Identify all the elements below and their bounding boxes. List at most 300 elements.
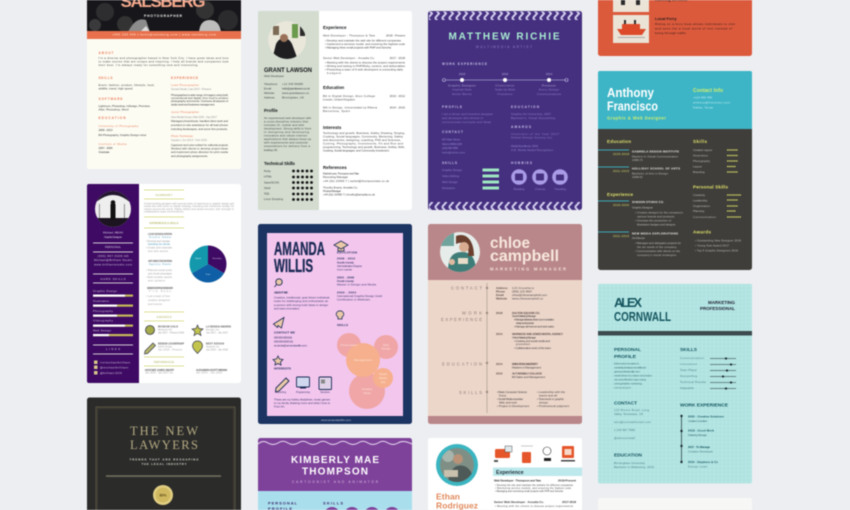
sidebar links: LINKS <box>106 347 120 351</box>
skills bubble chart: Media <box>379 376 387 380</box>
sidebar contact <box>93 230 133 266</box>
profile <box>442 105 493 124</box>
name: Graphic & Web Designer <box>607 116 666 120</box>
experience list: and updates <box>148 280 166 282</box>
pie chart: Digital <box>195 257 202 260</box>
panel: Salsberg photographer resume <box>87 0 241 169</box>
panel: Alex Cornwall resume <box>598 284 752 484</box>
work experience: • Collaborative work of the team <box>514 346 552 350</box>
contact <box>614 400 652 440</box>
role: CARTOONIST AND ANIMATOR <box>292 480 379 484</box>
personal skills ratings: Leadership <box>693 198 708 202</box>
technical skills <box>264 161 313 201</box>
personal profile: campaigns. <box>614 386 632 390</box>
left column: BA Photography, Graphic Design minor <box>98 133 147 137</box>
experience: illustration badges and designs. <box>637 222 676 226</box>
awards: Awards <box>693 230 711 234</box>
experience: • Writing and testing in PHP/Ruby, content, and deliverables <box>325 64 406 68</box>
contact me: amanda@amandawillis.com <box>274 344 308 348</box>
left column: After, Photoshop, Word <box>98 108 129 112</box>
interests: INTERESTS <box>274 366 291 370</box>
references: Jan 2014 - Jan 2016 <box>196 372 223 374</box>
name <box>436 492 478 510</box>
about me: looks for challenging and enthusiastic as <box>274 299 329 303</box>
experience column: and implement photo direction for print media <box>171 150 228 154</box>
experience: NEW MEDIA EXPLORATIONS <box>632 231 678 235</box>
interests <box>323 125 405 152</box>
divider bar <box>598 331 752 336</box>
gold frame <box>96 407 235 510</box>
experience column: New Media Group | Mar 2015 - Sep 2017 <box>171 115 217 119</box>
contact info <box>693 88 731 110</box>
personal profile: Extremely innovative & <box>614 362 639 366</box>
personal profile heading: PERSONAL <box>268 500 298 506</box>
skills lists <box>497 390 569 408</box>
experience list: ART DIRECTOR INTERN <box>148 260 172 263</box>
education: 2015-2018 <box>613 152 629 156</box>
profile: An experienced web developer with <box>264 116 311 120</box>
education: BA Sales and Management <box>512 375 545 379</box>
education: GABRIELA DESIGN INSTITUTE <box>632 149 679 153</box>
personal skills ratings: Organization <box>693 204 710 208</box>
interests: Technology and growth, Business, Hobby, Drawing, Singing, <box>323 131 405 135</box>
experience band: Experience <box>496 470 524 476</box>
skills lists: • Basic Computer Science <box>497 390 527 394</box>
interests: Free Art. <box>274 404 285 408</box>
left column: 2009 - 2013 <box>98 128 113 132</box>
percent badge: 80% <box>159 494 167 498</box>
about section: I'm a diverse and photographer based in New York City. I have great ideas and love <box>98 56 229 60</box>
hobbies icons <box>511 161 568 191</box>
skills bars <box>442 161 499 190</box>
skills bubble chart: Creative <box>362 387 373 391</box>
name: KIMBERLY MAE <box>291 455 379 466</box>
awards: BEST DESIGN <box>206 342 224 346</box>
skills sliders: Adaptable <box>680 386 694 390</box>
personal profile: PERSONAL <box>614 347 641 352</box>
interests: Sketches <box>320 391 331 394</box>
summary: A hard-working designer with several years of experience in graphic design and <box>144 202 235 206</box>
experience column: Worked with clients to develop project ideas <box>171 146 229 150</box>
contact <box>442 130 466 154</box>
contact details: chloe@chloecampbell.com <box>512 293 548 297</box>
sidebar contact: www.brilliantstudio.com <box>94 262 133 266</box>
skills ratings: Branding <box>693 170 705 174</box>
education: Graphic Art University, 2007 <box>511 112 551 116</box>
icon: magnifier <box>274 279 282 287</box>
personal skills ratings: Communication <box>693 215 716 219</box>
education: 2011-2015 <box>613 169 629 173</box>
experience list: Agency Name <box>149 263 172 266</box>
technical skills: HTML <box>264 174 272 178</box>
interests: programming, Technology and growth, Business, Hobby, Web, <box>323 145 405 149</box>
skills lists: • Teamwork in graphic <box>537 397 565 401</box>
skills: SKILLS <box>323 500 343 506</box>
peach body <box>428 280 582 416</box>
interests: These are my hobby disciplines, music games <box>274 398 331 402</box>
personal profile: grows professionally. I am <box>614 370 641 374</box>
experience column: photography and events. Oversees all aspects of <box>171 99 228 103</box>
contact: 1 234 567 7890 <box>614 428 635 432</box>
work experience timeline: Producer <box>542 84 556 88</box>
experience list: Studio Name <box>149 236 172 239</box>
skills sliders <box>680 347 736 390</box>
blue lower section <box>258 491 412 510</box>
skills lists: • Social Media expertise <box>497 397 523 401</box>
education: Certification in Webinars <box>337 298 371 302</box>
awards: AWARDS <box>511 125 531 129</box>
experience list: and web assets <box>148 250 169 253</box>
name: Francisco <box>607 100 658 114</box>
sidebar skill bars: HARD SKILLS <box>100 277 126 281</box>
sidebar contact: Graphic Designer <box>104 235 122 239</box>
icon: light bulb <box>336 311 344 319</box>
education: Lincoln, United Kingdom <box>323 98 356 102</box>
contact details: Website <box>496 296 507 300</box>
work experience: WARNOCK AND JONES DIGITAL AGENCY <box>512 332 563 336</box>
contact: (123) 456-7890 <box>442 146 458 150</box>
subtitle: TRENDS THAT ARE RESHAPING <box>130 458 199 462</box>
skills ratings: Creative Layout <box>693 148 712 152</box>
personal profile heading <box>268 500 298 510</box>
subtitle <box>130 458 199 466</box>
panel: blank card edge <box>598 498 752 510</box>
references: Rachel Lane, Thompson and Tate <box>323 172 359 176</box>
about me: and team innovation. <box>274 306 300 310</box>
sidebar skill bars: Photography <box>93 309 114 313</box>
experience list: LEAD DESIGN INTERN <box>148 233 172 236</box>
sidebar links <box>93 344 133 375</box>
experience column <box>171 76 229 158</box>
awards: • Young Star Award 2017 <box>695 244 729 248</box>
left column: 2007 - 2009 <box>98 146 113 150</box>
pie chart: Branding <box>213 257 222 260</box>
interests: Cooking, Social languages, and Community Investment <box>323 148 389 152</box>
experience list: • Planned social posts <box>146 269 173 272</box>
experience list: and interns <box>148 303 163 306</box>
header photo <box>87 0 241 32</box>
panel: Grant Lawson resume <box>258 11 412 210</box>
work experience: • Managed all areas of team communication <box>514 318 554 322</box>
sidebar <box>87 184 139 383</box>
skills ratings: Skills <box>693 139 707 144</box>
experience: 2011-2015 <box>613 234 629 238</box>
timeline axis <box>486 283 488 413</box>
panel: Grant Lawson resume: Web Developer <box>264 74 284 78</box>
experience column: Lead Photographer <box>171 83 199 87</box>
chevron border bottom <box>429 202 581 210</box>
education: BRIGHTON UNIVERSITY <box>512 362 538 366</box>
interests: Cooking, Social languages, Community, Mentoring, Safety <box>323 134 404 138</box>
experience column: Photo Technician <box>171 134 193 138</box>
name <box>614 295 671 324</box>
experience: various brands and products. <box>637 214 675 218</box>
about section: ABOUT <box>98 51 114 55</box>
experience list: Web Developer - Thompson and Tate <box>494 478 541 482</box>
experience list: and visual campaigns <box>148 272 173 276</box>
work experience timeline: Freelance <box>498 92 513 96</box>
role: MULTIMEDIA ARTIST <box>476 45 532 49</box>
contact details: Address <box>496 286 508 290</box>
experience: budgets <box>327 71 342 75</box>
awards: • Outstanding New Designer 2019 <box>695 238 741 242</box>
education: Cum Laude <box>337 268 352 272</box>
sidebar skill bars: Graphic Design <box>93 289 117 293</box>
references: REFERENCE <box>154 360 174 364</box>
skills bars: SKILLS <box>442 161 457 165</box>
portrait <box>440 232 480 272</box>
left column: SOFTWARE <box>98 97 122 101</box>
contact rows: Website <box>264 91 275 95</box>
work experience: promotion <box>516 342 530 346</box>
education: 1998-02 <box>632 175 643 179</box>
awards: Jan 2017 - Present 2018 <box>158 332 185 334</box>
references: HEATHER JAMES SMART <box>145 369 175 372</box>
about section: to make stories that are unique and inspiring. I help all brands and companies look <box>98 60 229 64</box>
hobbies icons: Cinema <box>535 187 545 191</box>
education <box>614 452 654 469</box>
skills bubble chart: Management <box>354 358 372 362</box>
teal header <box>598 71 752 129</box>
experience: company's visual strategies. <box>637 253 677 257</box>
experience: • Presenting a team of 5 web developers to exceeding daily <box>325 68 404 72</box>
summary: visual arts with focus on digital strategy, branding and interactive design for <box>144 205 234 208</box>
work experience: • Manage all Internet and web sales <box>514 324 555 328</box>
icon: ferry boat <box>613 15 649 43</box>
education: Birmingham University <box>614 461 646 465</box>
awards: Design Inc. <box>206 328 220 332</box>
profile: innovative and robust internet <box>264 134 307 138</box>
profile <box>264 108 311 152</box>
work experience timeline: Design Lead <box>688 464 707 468</box>
work experience timeline: 2017 - To Manage <box>688 445 710 449</box>
education: 2000 - 2004 <box>337 290 356 294</box>
profile: includes UI, mobile and web <box>264 123 304 127</box>
work experience timeline <box>680 402 728 468</box>
experience: Senior Web Developer - Arcadia Co. <box>323 56 375 60</box>
experience list: Senior Web Developer - Arcadia Co. <box>494 500 544 504</box>
experience list: SENIOR GRAPHIC DESIGNER <box>147 287 173 290</box>
experience <box>323 25 406 75</box>
references: Timothy Evans, Arcadia Co. <box>323 186 358 190</box>
experience column: conventional and digital, from food to product <box>171 96 228 100</box>
education: 2008 - 2010 <box>337 256 355 260</box>
left column: Lightroom, Photoshop, InDesign, Premiere, <box>98 104 151 108</box>
experience column: studio work and business management. <box>171 102 215 106</box>
education: Bachelor's, Visual Storytelling <box>511 116 555 120</box>
skills lists: • Project in Development <box>497 404 529 408</box>
panel: Kimberly Mae Thompson resume <box>258 438 412 510</box>
work experience: • Creating and social media and <box>514 339 550 343</box>
contact: Valley, Tennessee, US <box>614 412 643 416</box>
experience: • Manages and delegates projects for <box>635 241 681 245</box>
skills lists: Web, and more <box>499 400 517 404</box>
panel: Matthew Richie resume <box>428 11 582 210</box>
awards <box>693 230 741 252</box>
name: chloe <box>490 235 530 252</box>
awards: Jan 2016 - Present <box>158 348 182 352</box>
education: Bachelor in Marketing, 2015 <box>614 465 654 469</box>
education: 2014 - 2016 <box>390 106 405 110</box>
awards: Illustrator of the Year 2017 <box>511 132 559 136</box>
hobbies icons: HOBBIES <box>511 161 532 165</box>
experience column: Captured and color-edited for editorial projects <box>171 143 229 147</box>
profile: communicate concepts and ideas <box>442 120 492 124</box>
experience: Web Developer - Thompson & Tate <box>323 34 375 38</box>
personal skills ratings: Personal Skills <box>693 184 728 190</box>
summary: clients around the world. Highly skilled and detail-oriented, with strength in <box>144 208 235 211</box>
work experience timeline: Marketing Manager <box>688 433 707 437</box>
personal skills ratings: Creativity <box>693 193 706 197</box>
experience list <box>494 478 576 508</box>
profile: development. Strong skills in front <box>264 126 311 130</box>
work experience timeline: 2016 <box>502 72 509 76</box>
work experience timeline: 2020 - Creative Solutions <box>688 414 724 418</box>
icon tile upper <box>613 0 649 12</box>
ferry text: being through traffic. <box>655 31 687 35</box>
personal profile: result-driven by nature and action <box>614 374 652 378</box>
contact info: Contact Info <box>693 88 723 94</box>
work experience: 2018 <box>496 311 503 315</box>
experience: Art Director <box>632 236 645 240</box>
name <box>490 235 566 272</box>
awards: AWARDS <box>156 315 172 319</box>
ferry text: and sees the a local world of rest instead of <box>655 26 732 30</box>
technical skills: Shell <box>264 186 271 190</box>
contact info: anthony@francisco.com <box>693 100 731 104</box>
experience: • Oversaw the production of <box>635 218 671 222</box>
interests <box>274 366 332 408</box>
about me: Creative, intellectual, goal driven individual, <box>274 296 330 300</box>
panel: red card with ferry <box>598 0 752 56</box>
references: Product Manager <box>323 189 341 193</box>
interests: and discoveries, designing, coaching, PhD and Sciences, <box>323 138 401 142</box>
skills <box>323 500 400 510</box>
awards: Museum Art <box>158 328 172 332</box>
about me: a person with strong bold ideas in design <box>274 303 328 307</box>
experience: • Implement a services model, and ensuring the highest code <box>325 42 405 46</box>
experience: • Meeting with the clients to discuss the project requirements <box>325 60 406 64</box>
profile: leading UK. <box>264 148 278 152</box>
interests: Sketching <box>276 391 287 394</box>
technical skills: Linux Scripting <box>264 197 283 201</box>
education <box>337 250 382 302</box>
education: BA in Digital Design, Eton College <box>323 94 375 98</box>
summary: SUMMARY <box>156 193 173 197</box>
work experience timeline: Senior Mentor <box>452 92 472 96</box>
left column: Institute of Media <box>98 142 127 146</box>
sidebar skill bars: Videography <box>93 318 114 322</box>
education: Masters in Management <box>512 366 541 370</box>
references <box>144 356 227 374</box>
work experience timeline: 2018 - Good Work <box>688 428 714 432</box>
work experience timeline <box>442 62 568 96</box>
name <box>291 455 379 478</box>
experience <box>598 192 684 257</box>
awards <box>511 125 559 152</box>
education: Bachelor of Arts in Design <box>632 172 668 176</box>
skills lists: • Leadership with the <box>537 390 565 394</box>
name <box>274 239 325 276</box>
panel: Amanda Willis resume <box>258 224 412 424</box>
work experience: design and products <box>516 321 535 325</box>
experience column: EXPERIENCE <box>171 76 198 80</box>
profile: Profile <box>264 108 278 113</box>
work experience timeline: Graphic Designer <box>448 84 476 88</box>
education: Borcelle University <box>337 260 355 264</box>
profile: I am a driven and inventive designer <box>442 112 493 116</box>
awards: Jan 2017 - Jan 2017 <box>206 332 229 334</box>
experience list: • Led a team of four <box>146 295 170 298</box>
education: HOLLIDAY SCHOOL OF ARTS <box>632 166 680 170</box>
work experience: Online Marketing Manager <box>512 336 536 340</box>
technical skills: SQL <box>264 192 270 196</box>
experience list <box>144 216 184 306</box>
work experience timeline: WORK EXPERIENCE <box>442 62 487 66</box>
contact info: Dallas, Texas <box>693 106 714 110</box>
ferry text: Riding on a ferry boat allows individuals to visit <box>655 22 735 26</box>
references: Recruiting Manager <box>323 175 348 179</box>
awards: • Top 5 Graphic Designers 2016 <box>695 248 738 252</box>
contact rows: Email <box>264 86 272 90</box>
name: MATTHEW RICHIE <box>448 32 560 42</box>
left column: wildlife, travel, high speed <box>98 86 133 90</box>
contact rows: Address <box>264 96 275 100</box>
contact me <box>274 330 308 348</box>
personal profile: constantly develops new skills and <box>614 366 646 370</box>
technical skills: Ruby <box>264 169 271 173</box>
contact: alex@cornwallemail.com <box>614 420 652 424</box>
education <box>511 105 555 120</box>
education <box>598 139 680 179</box>
experience list: • Monitoring service models, and ensuring the highest code <box>495 487 572 490</box>
work experience timeline: Scale Up Work <box>495 88 516 92</box>
contact me: CONTACT ME <box>274 330 295 334</box>
name: ALEX <box>614 295 642 310</box>
awards: Jan 2015 - Jan 2016 <box>206 348 229 352</box>
sidebar contact: (555) 867-5309 HD <box>98 254 128 258</box>
experience column: Managed photoshoots, handled client work and <box>171 119 228 123</box>
experience column: Square | Jun 2013 - Feb 2015 <box>171 138 207 142</box>
work experience: DALTON SQUARE CO. <box>512 311 540 315</box>
experience list: EXPERIENCE & SKILLS <box>150 221 179 225</box>
name: AMANDA <box>274 239 325 259</box>
experience column: and photography assignments. <box>171 154 208 158</box>
technical skills: Technical Skills <box>264 161 296 166</box>
panel: The New Lawyers cover <box>87 398 241 510</box>
contact rows <box>264 82 311 100</box>
personal skills ratings <box>693 184 741 219</box>
education: Master in Design and Media <box>337 282 376 286</box>
sidebar <box>258 11 319 210</box>
ferry text: Local Ferry <box>655 16 677 21</box>
contact details <box>496 286 548 300</box>
work experience timeline: Communications <box>537 92 562 96</box>
contact details: Email <box>496 293 504 297</box>
left column: Event, fashion, product, lifestyle, food, <box>98 83 155 87</box>
hobbies icons: Traveling <box>554 187 566 191</box>
references: References <box>323 165 347 170</box>
skills bubble chart: Social <box>379 372 387 376</box>
title: THE NEW <box>130 424 198 438</box>
name <box>607 86 666 120</box>
education: Barcelona, Spain <box>323 109 350 113</box>
personal skills ratings: Planning <box>693 209 705 213</box>
experience list: • Managing and mentoring small projects with PHP and Sencha <box>495 490 564 493</box>
work experience timeline: WORK EXPERIENCE <box>680 402 728 408</box>
left column: EDUCATION <box>98 116 126 120</box>
role: MARKETING <box>708 300 735 305</box>
